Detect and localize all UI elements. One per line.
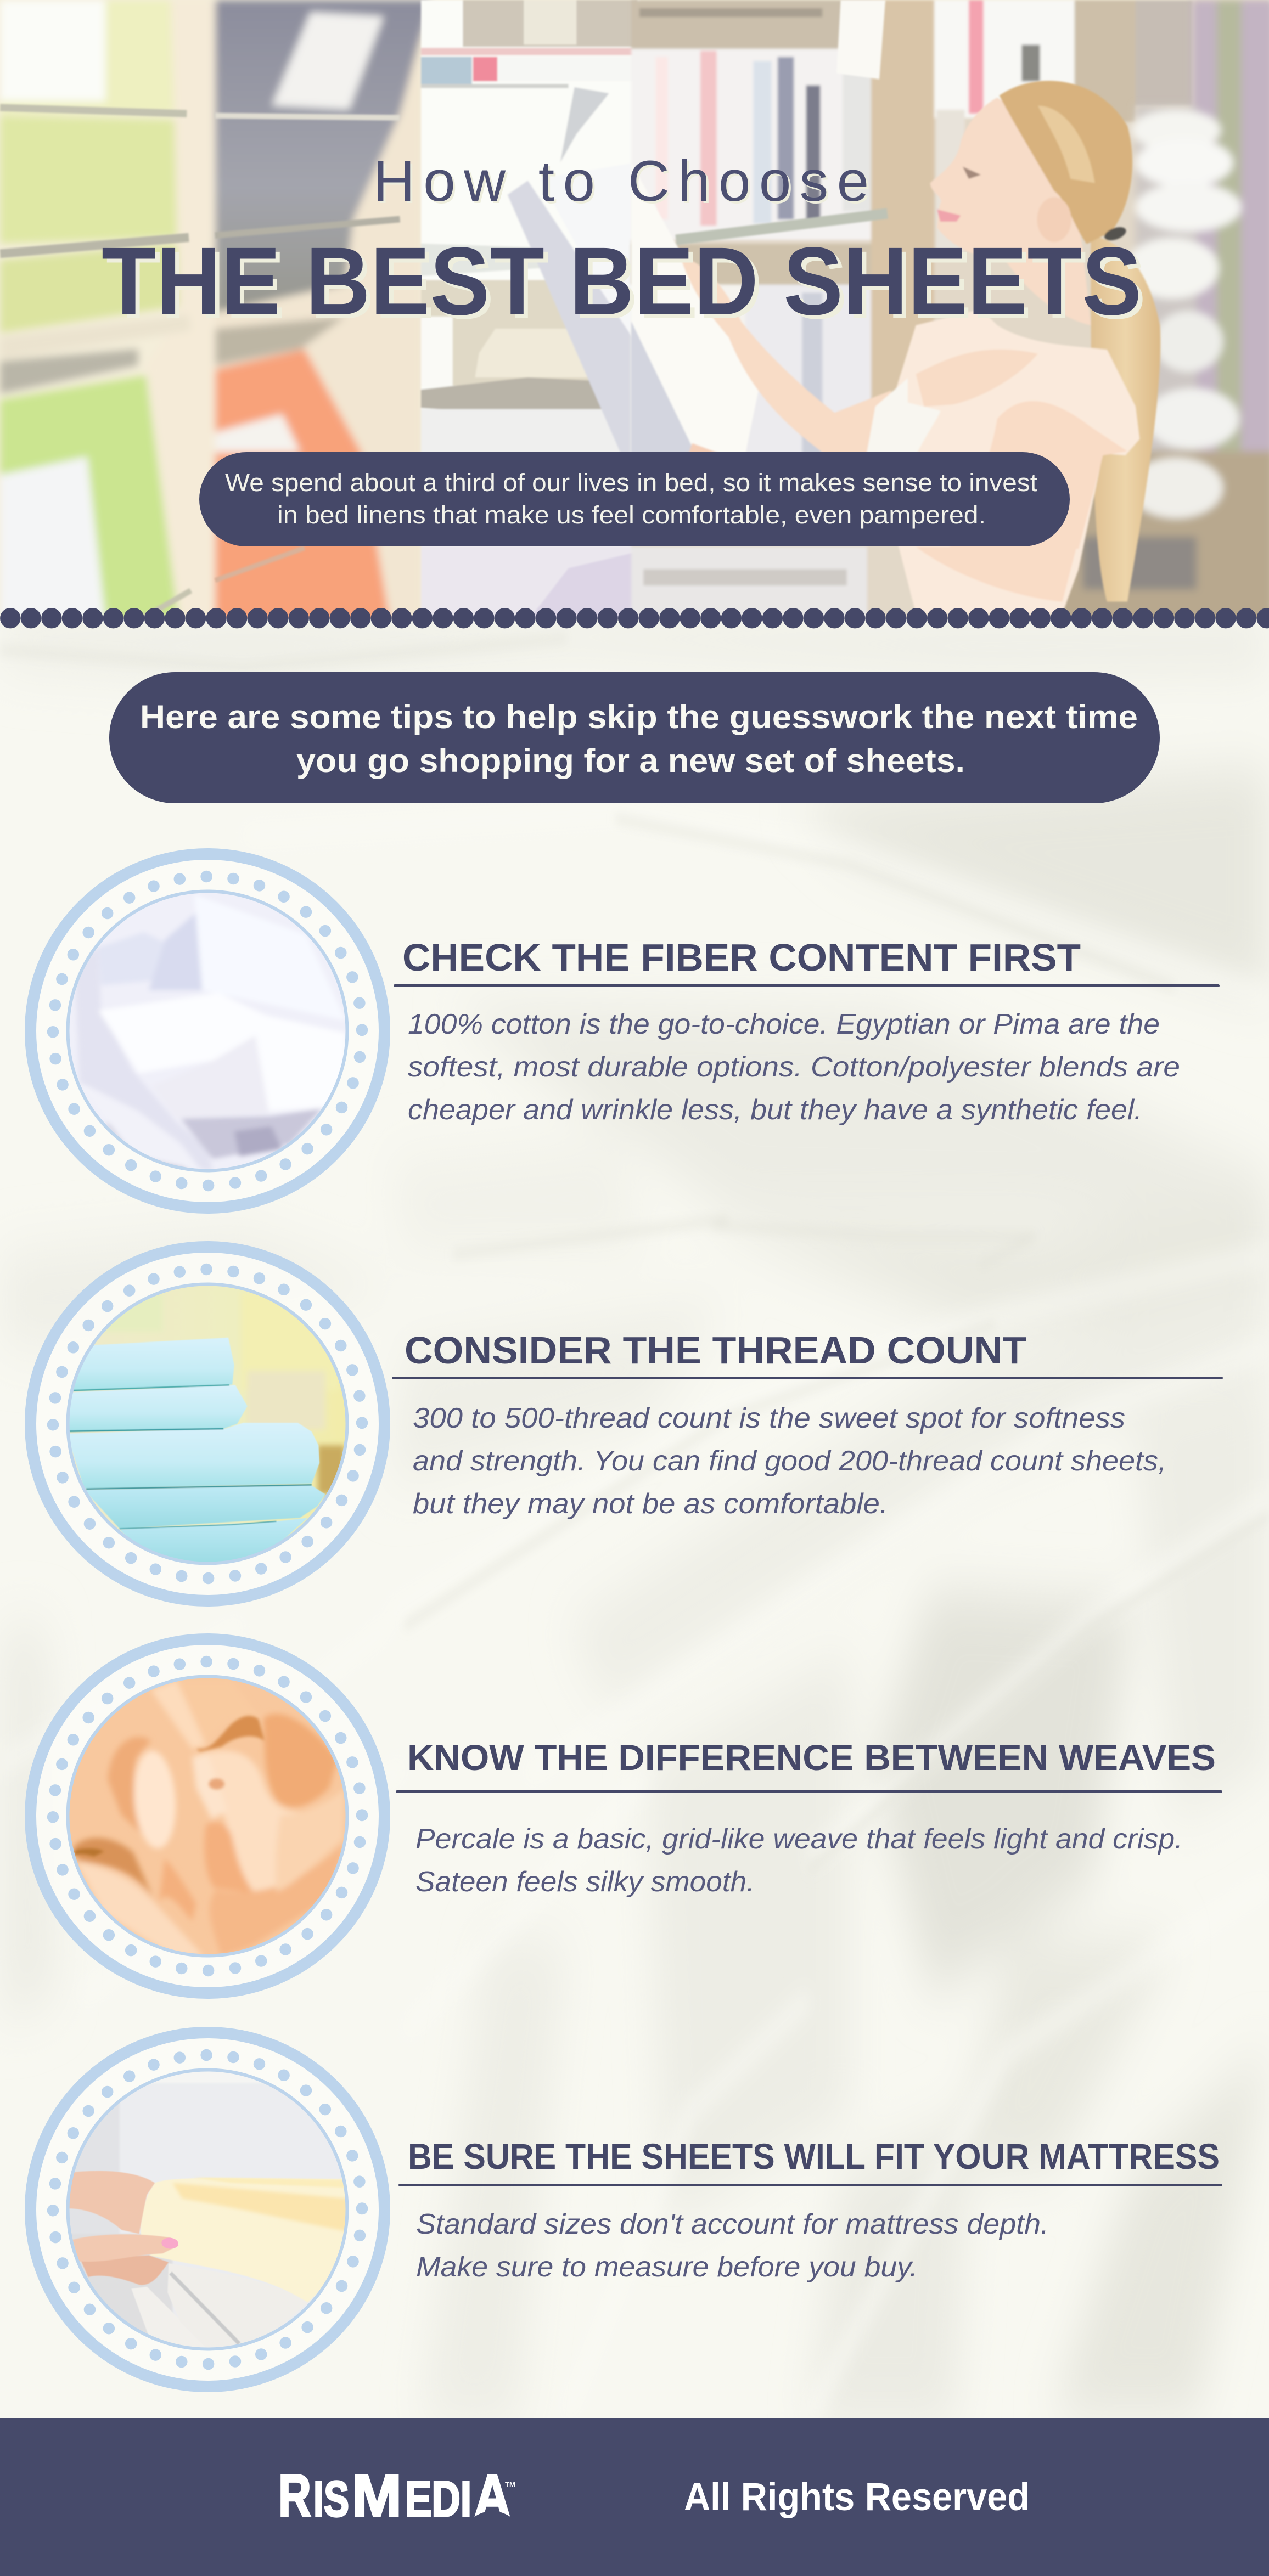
- rule: [398, 2184, 1222, 2186]
- tip 4: fit the mattress: [31, 2032, 1222, 2387]
- rule: [392, 1377, 1223, 1379]
- footer bar: [0, 2418, 1269, 2576]
- decorative dot band: [10, 608, 1269, 628]
- body text: Percale is a basic, grid-like weave that feels light and crisp.: [415, 1823, 1183, 1855]
- body text: Make sure to measure before you buy.: [416, 2251, 918, 2283]
- body text: [408, 1008, 1180, 1126]
- intro callout pill: in bed linens that make us feel comfortable, even pampered.: [277, 501, 986, 529]
- heading: KNOW THE DIFFERENCE BETWEEN WEAVES: [407, 1737, 1216, 1778]
- title: How to Choose: How to Choose: [373, 149, 869, 213]
- logo: RISMedia: IS: [313, 2471, 349, 2527]
- logo: RISMedia: R: [278, 2462, 311, 2529]
- tips intro pill: Here are some tips to help skip the guesswork the next time: [140, 698, 1138, 735]
- icon: ring with folded blue sheets photo: [31, 1247, 384, 1601]
- body text: softest, most durable options. Cotton/polyester blends are: [408, 1051, 1180, 1083]
- background: crumpled white bed sheet: [0, 615, 1269, 2425]
- tip 1: fiber content: [31, 854, 1220, 1208]
- body text: but they may not be as comfortable.: [413, 1488, 888, 1520]
- footer text: All Rights Reserved: [684, 2476, 1030, 2519]
- rule: [394, 984, 1220, 987]
- body text: 100% cotton is the go-to-choice. Egyptian or Pima are the: [408, 1008, 1160, 1040]
- tip 2: thread count: [31, 1247, 1223, 1601]
- body text: Sateen feels silky smooth.: [415, 1866, 755, 1898]
- logo: RISMedia: A: [474, 2462, 510, 2529]
- icon: ring with satin photo: [31, 1639, 384, 1993]
- body text: Standard sizes don't account for mattress depth.: [416, 2208, 1049, 2240]
- heading: CHECK THE FIBER CONTENT FIRST: [402, 936, 1081, 979]
- tips intro pill: you go shopping for a new set of sheets.: [296, 742, 965, 779]
- heading: BE SURE THE SHEETS WILL FIT YOUR MATTRESS: [408, 2136, 1220, 2177]
- logo: RISMedia: [278, 2462, 515, 2529]
- body text: [415, 1823, 1183, 1898]
- icon: ring with white fabric photo: [31, 854, 384, 1208]
- logo: RISMedia: EDI: [405, 2471, 471, 2527]
- icon: ring with hands fitting sheet photo: [31, 2032, 384, 2387]
- intro callout pill: We spend about a third of our lives in bed, so it makes sense to invest: [225, 469, 1038, 497]
- logo: RISMedia: TM: [505, 2481, 515, 2489]
- body text: cheaper and wrinkle less, but they have a synthetic feel.: [408, 1094, 1142, 1126]
- body text: [416, 2208, 1049, 2283]
- intro callout pill: [199, 452, 1070, 546]
- title: The Best Bed Sheets: THE BEST BED SHEETS: [102, 228, 1142, 335]
- heading: CONSIDER THE THREAD COUNT: [405, 1329, 1026, 1372]
- hero photo: woman choosing sheets in a store: [0, 0, 1269, 626]
- logo: RISMedia: M: [352, 2462, 402, 2529]
- tips intro pill: [109, 672, 1160, 803]
- body text: and strength. You can find good 200-thread count sheets,: [413, 1445, 1166, 1477]
- tip 3: weaves: [31, 1639, 1222, 1993]
- body text: [413, 1402, 1166, 1520]
- body text: 300 to 500-thread count is the sweet spot for softness: [413, 1402, 1125, 1434]
- rule: [396, 1790, 1222, 1793]
